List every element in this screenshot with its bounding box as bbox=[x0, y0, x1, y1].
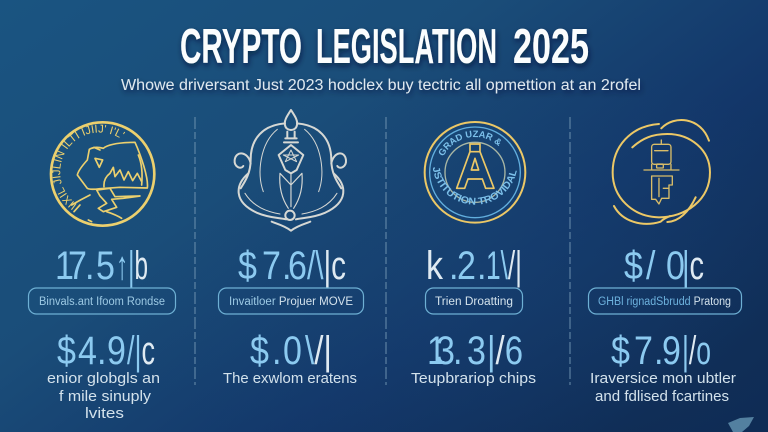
pill label: Binvals.ant Ifoom Rondse bbox=[39, 296, 165, 308]
stat: bottom value: |/o bbox=[682, 329, 711, 373]
stat: bottom value: /|c bbox=[127, 329, 155, 373]
description: Teupbrariop chips bbox=[411, 371, 536, 387]
pill label: GHBl rignadSbrudd Pratong bbox=[598, 296, 731, 308]
stat: top value bbox=[55, 242, 148, 288]
icon: gold coin with bull: IIXIL JIJLIN ILTI IJIIJ' I'L' I' - bbox=[52, 124, 126, 210]
column 1 bbox=[28, 121, 176, 422]
title bbox=[180, 20, 589, 74]
stat: bottom value: |/6 bbox=[487, 329, 523, 373]
icon: gold ring with device bbox=[613, 120, 710, 224]
column 2 bbox=[218, 110, 364, 387]
stat: top value bbox=[426, 242, 522, 288]
stat: bottom value: \/| bbox=[305, 329, 332, 373]
title: CRYPTO bbox=[180, 20, 302, 74]
stat: top value: $7.6 bbox=[238, 242, 307, 288]
pill label bbox=[588, 288, 742, 314]
stat: bottom value: $4.9 bbox=[57, 327, 126, 373]
description bbox=[590, 371, 736, 405]
stat: top value: /\|c bbox=[307, 244, 346, 288]
stat: bottom value bbox=[250, 327, 332, 373]
description: Iraversice mon ubtler bbox=[590, 371, 736, 387]
description bbox=[47, 371, 160, 422]
icon: seal with letter A: JSTITUTION TROVIDAL bbox=[433, 167, 517, 205]
stat: top value bbox=[238, 242, 346, 288]
description: The exwlom eratens bbox=[223, 371, 357, 387]
stat: bottom value bbox=[427, 327, 523, 373]
pill label: Invaitloer Projuer MOVE bbox=[229, 296, 353, 308]
column 4 bbox=[588, 120, 742, 405]
description: f mile sinuply bbox=[59, 389, 152, 405]
stat: bottom value: 13.3 bbox=[427, 327, 486, 373]
icon: gold coin with bull bbox=[50, 121, 156, 227]
stat: top value: 1\/| bbox=[486, 244, 522, 288]
subtitle: Whowe driversant Just 2023 hodclex buy tectric all opmettion at an 2rofel bbox=[121, 77, 641, 94]
pill label bbox=[426, 288, 522, 314]
pill label: Trien Droatting bbox=[435, 296, 513, 308]
stat: top value: ↑|b bbox=[116, 244, 148, 288]
stat: top value: $/0 bbox=[624, 242, 685, 288]
stat: bottom value bbox=[611, 327, 711, 373]
column 3 bbox=[411, 121, 536, 387]
pill label bbox=[28, 288, 176, 314]
title: 2025 bbox=[513, 20, 589, 74]
stat: bottom value: $7.9 bbox=[611, 327, 681, 373]
icon: ornamental emblem bbox=[235, 110, 346, 231]
stat: top value: |c bbox=[682, 244, 704, 288]
stat: bottom value bbox=[57, 327, 155, 373]
icon: seal with letter A bbox=[424, 121, 526, 224]
title: LEGISLATION bbox=[316, 20, 497, 74]
description: and fdlised fcartines bbox=[595, 389, 729, 405]
icon: seal with letter A: GRAD UZAR & bbox=[438, 130, 501, 156]
icon: corner logo bbox=[728, 417, 754, 432]
stat: top value: 17.5 bbox=[55, 242, 115, 288]
description: lvites bbox=[85, 406, 124, 422]
stat: top value: k.2. bbox=[426, 242, 486, 288]
description: enior globgls an bbox=[47, 371, 160, 387]
stat: bottom value: $.0 bbox=[250, 327, 302, 373]
pill label bbox=[218, 288, 364, 314]
